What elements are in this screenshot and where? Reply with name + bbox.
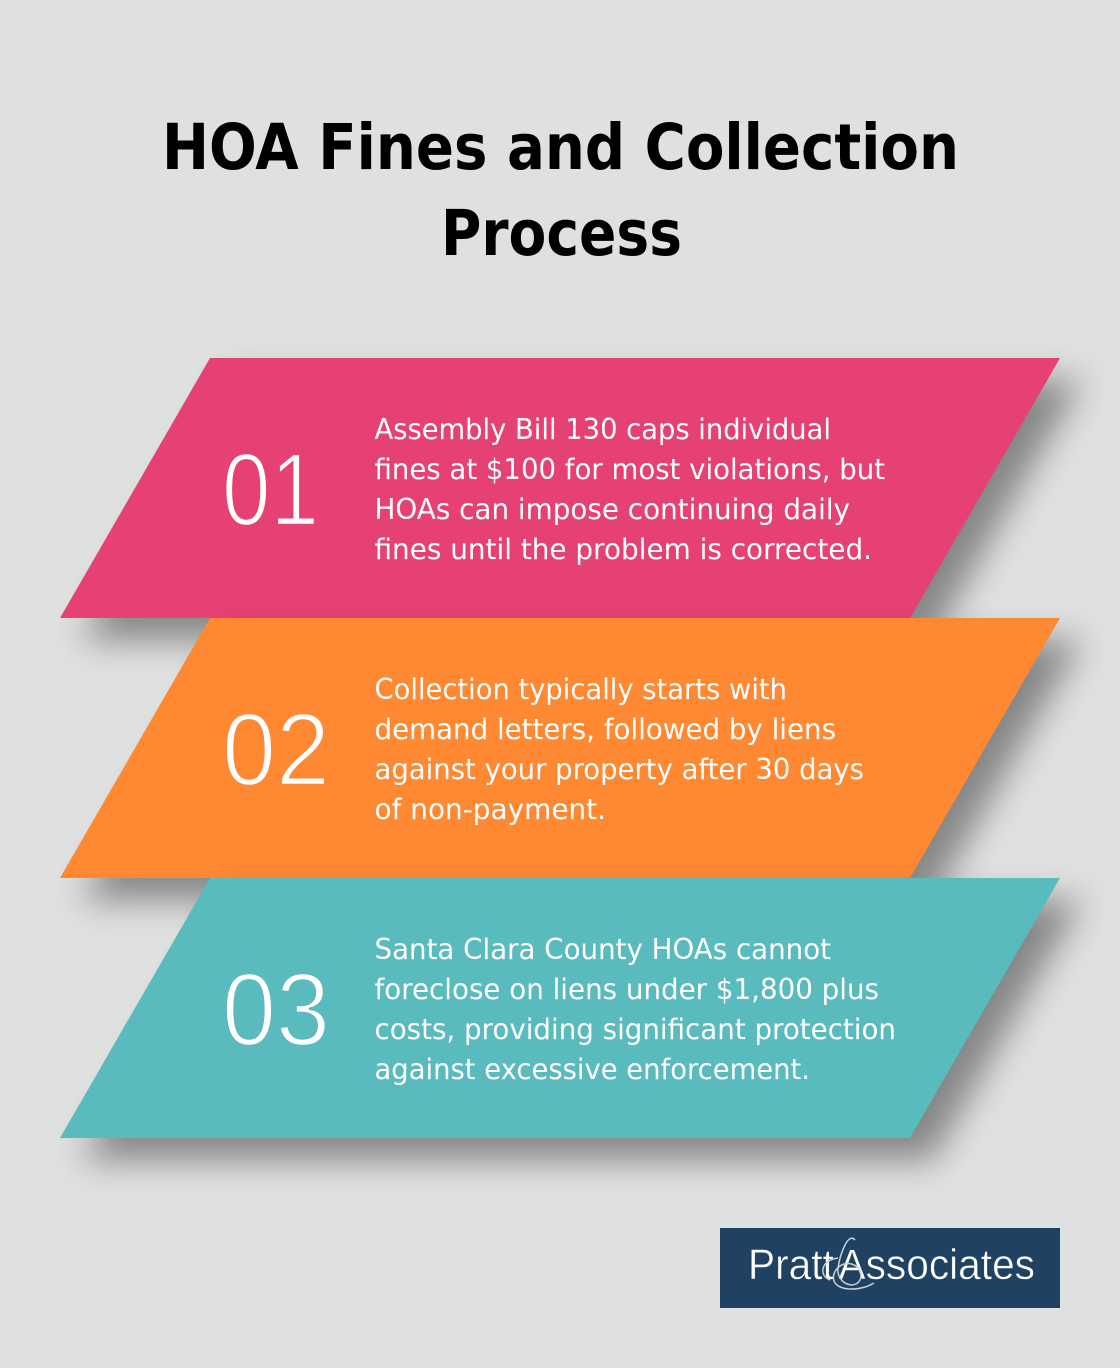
text: step 01 description: HOAs can impose continuing daily [374,493,850,526]
text: step 03 description: Santa Clara County HOAs cannot [374,933,831,966]
logo wordmark: PrattAssociates [748,1241,1035,1289]
panel: step 03 [60,878,1082,1160]
panel: step 02 [60,618,1082,900]
logo ampersand swirl [823,1238,874,1289]
title: HOA Fines and Collection [162,111,959,184]
number: 02: 02 [222,692,330,807]
text: step 03 description: costs, providing significant protection [374,1013,896,1046]
number: 03: 03 [222,952,330,1067]
title [162,111,959,270]
text: step 02 description: of non-payment. [374,793,606,826]
text: step 03 description: against excessive enforcement. [374,1053,810,1086]
text: step 02 description: Collection typically starts with [374,673,787,706]
text: step 03 description [374,933,896,1086]
panel: step 01 [60,358,1082,640]
logo: Pratt & Associates [720,1228,1060,1308]
text: step 03 description: foreclose on liens under $1,800 plus [374,973,879,1006]
text: step 01 description: fines until the problem is corrected. [374,533,872,566]
text: step 02 description: demand letters, followed by liens [374,713,836,746]
title: Process [441,197,682,270]
text: step 02 description: against your property after 30 days [374,753,864,786]
text: step 01 description [374,413,885,566]
text: step 02 description [374,673,864,826]
text: step 01 description: fines at $100 for most violations, but [374,453,885,486]
text: step 01 description: Assembly Bill 130 caps individual [374,413,831,446]
number: 01: 01 [222,432,319,547]
